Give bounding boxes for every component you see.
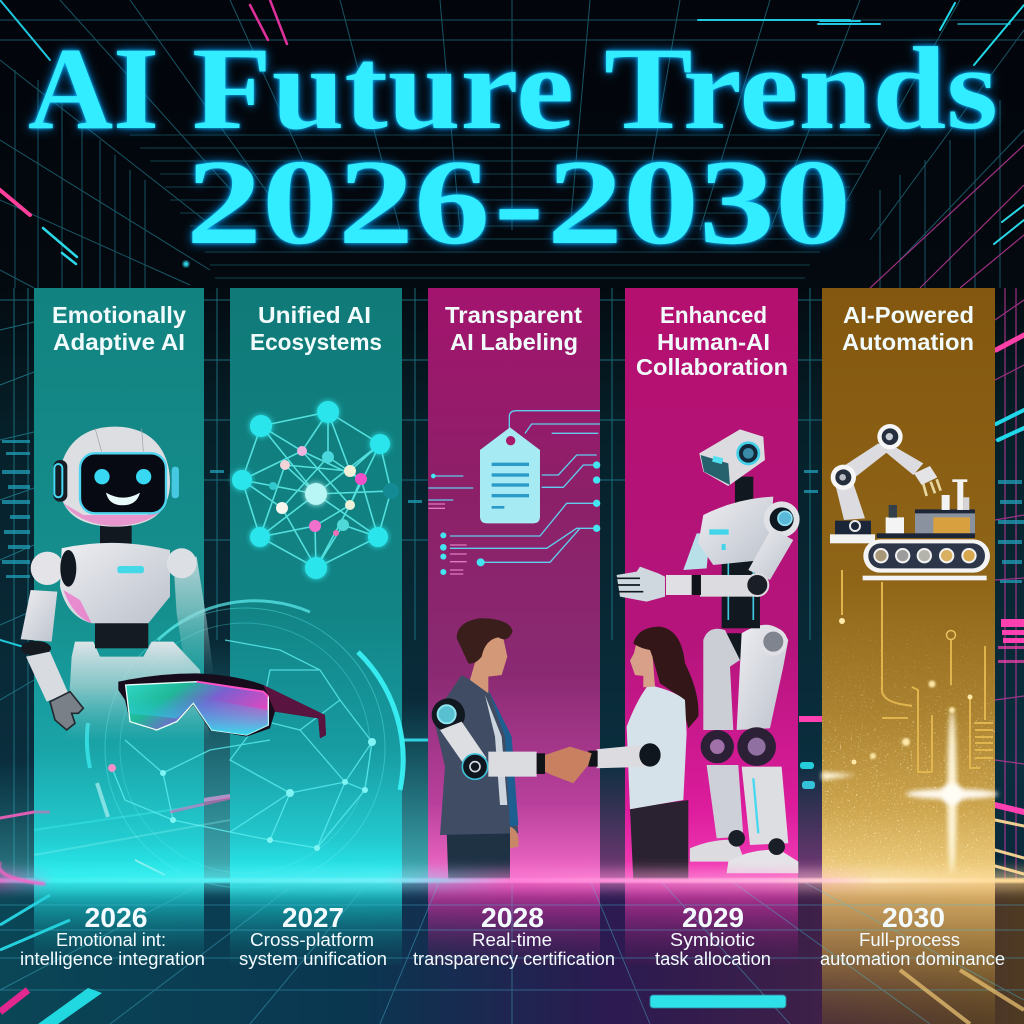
timeline: 2026 — [20, 902, 205, 969]
timeline: 2030: Full-process — [859, 930, 960, 950]
robot head — [59, 427, 170, 527]
title — [28, 23, 998, 270]
icon: smart glasses — [118, 673, 326, 738]
panel headings: Adaptive AI — [53, 329, 185, 355]
handshake — [545, 747, 592, 783]
timeline: 2028 — [413, 902, 615, 969]
robot waist — [95, 620, 148, 648]
panel headings: Emotionally — [52, 302, 186, 328]
panel headings — [52, 302, 974, 380]
robot ears — [53, 460, 179, 502]
circuit nodes — [431, 461, 600, 575]
timeline: 2027 — [239, 902, 387, 969]
icon: friendly robot — [21, 427, 213, 740]
robot face screen — [80, 453, 166, 513]
timeline: 2027: 2027 — [282, 902, 344, 933]
panel headings: Collaboration — [636, 354, 788, 380]
timeline: 2027: system unification — [239, 949, 387, 969]
robot head — [699, 429, 765, 486]
panel headings: AI Labeling — [450, 329, 578, 355]
icon: humanoid robot — [617, 429, 800, 873]
robot neck — [735, 477, 753, 505]
gold speckles — [822, 600, 995, 880]
title: Future — [192, 23, 574, 154]
robot arm — [617, 528, 793, 602]
timeline: 2029 — [655, 902, 771, 969]
title: 2030 — [547, 135, 851, 270]
timeline: 2030: 2030 — [882, 902, 945, 933]
panel headings: Unified AI — [258, 302, 371, 328]
robot torso — [60, 543, 170, 623]
timeline: 2028: Real-time — [472, 930, 552, 950]
gap glow — [0, 640, 822, 880]
background data bars — [2, 440, 1024, 789]
panel headings: Ecosystems — [250, 329, 382, 355]
tag body — [480, 427, 540, 523]
illustration: woman — [545, 627, 698, 880]
panel headings: Human-AI — [657, 329, 770, 355]
timeline: 2026: Emotional int: — [56, 930, 166, 950]
floor light bars — [0, 895, 1024, 1024]
timeline: 2029: task allocation — [655, 949, 771, 969]
panel headings: Automation — [842, 329, 974, 355]
timeline: 2026: 2026 — [84, 902, 148, 933]
panel headings: Transparent — [445, 302, 582, 328]
timeline: 2027: Cross-platform — [250, 930, 374, 950]
timeline: 2028: 2028 — [481, 902, 544, 933]
lower panel extensions — [34, 880, 995, 1024]
gold circuit traces and sparkle — [822, 570, 998, 874]
left arm — [21, 550, 83, 730]
panel: emotionally adaptive AI — [34, 288, 204, 880]
robot torso — [698, 497, 773, 565]
glowing ring — [0, 862, 1024, 890]
panel headings: Enhanced — [660, 302, 767, 328]
icon: label tag and circuits — [428, 411, 600, 575]
hologram sphere — [34, 601, 403, 888]
floor grid — [0, 880, 1024, 1024]
title: 2026 — [186, 135, 490, 270]
icon: neural network — [232, 401, 399, 579]
panel: transparent AI labeling — [428, 288, 600, 880]
title: - — [494, 135, 544, 270]
title: Trends — [604, 23, 998, 154]
illustration: man with robotic arm — [432, 618, 545, 880]
timeline: 2028: transparency certification — [413, 949, 615, 969]
icon: industrial robot and conveyor — [830, 424, 990, 580]
panel headings: AI-Powered — [843, 302, 974, 328]
robot neck — [100, 525, 132, 547]
robot spine — [722, 557, 760, 628]
panel: unified AI ecosystems — [230, 288, 402, 880]
timeline: 2030 — [820, 902, 1005, 969]
timeline: 2026: intelligence integration — [20, 949, 205, 969]
panel: AI-powered automation — [822, 288, 995, 880]
timeline: 2030: automation dominance — [820, 949, 1005, 969]
timeline: 2029: 2029 — [682, 902, 744, 933]
title: AI — [28, 23, 159, 154]
robot legs — [690, 625, 798, 873]
robot shoulder — [764, 501, 800, 537]
robot hips — [67, 642, 210, 740]
panel: enhanced human-AI collaboration — [625, 288, 798, 880]
timeline: 2029: Symbiotic — [670, 930, 755, 950]
circuit lines — [428, 411, 600, 574]
